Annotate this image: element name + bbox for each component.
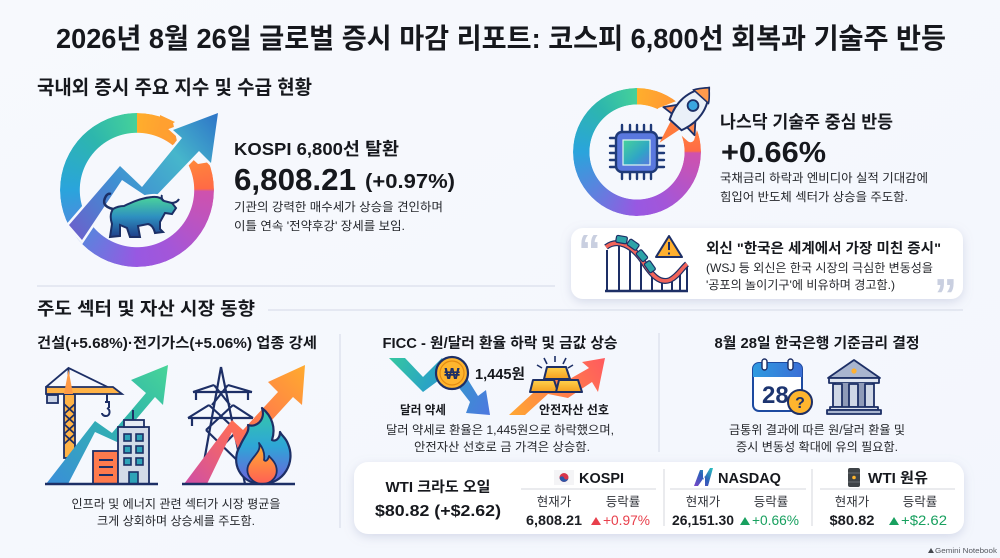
panel: FICC: 1,445원 (475, 366, 525, 383)
column: NASDAQ: +0.66% (752, 513, 799, 528)
panel: Bank of Korea rate decision (714, 335, 920, 454)
panel: FICC: 달러 약세로 환율은 1,445원으로 하락했으며, (386, 422, 614, 437)
text block: KOSPI: KOSPI 6,800선 탈환 (234, 139, 399, 159)
column: NASDAQ: 26,151.30 (672, 513, 734, 528)
icon: rising arrow (509, 358, 605, 415)
column: NASDAQ: NASDAQ (718, 471, 781, 487)
icon: calendar with question mark (753, 359, 812, 414)
column: WTI oil: WTI 원유 (868, 470, 928, 487)
panel: construction and utilities sectors: 크게 상회하며 상승세를 주도함. (97, 514, 255, 528)
column: WTI oil: +$2.62 (901, 513, 947, 528)
panel: construction and utilities sectors: 건설(+5.68%)·전기가스(+5.06%) 업종 강세 (37, 335, 317, 352)
panel: construction and utilities sectors (37, 335, 317, 528)
column: KOSPI: 등락률 (606, 495, 640, 509)
text block: KOSPI (234, 139, 455, 233)
text block: NASDAQ: +0.66% (721, 137, 826, 169)
text block: NASDAQ: 힘입어 반도체 섹터가 상승을 주도함. (720, 190, 908, 204)
icon: chip ring with rocket (573, 86, 710, 216)
icon: closing quote: ” (934, 269, 957, 321)
column: KOSPI: 6,808.21 (526, 513, 583, 528)
panel: FICC: 달러 약세 (400, 403, 446, 417)
icon: calendar with question mark: 28 (762, 382, 789, 409)
panel: Bank of Korea rate decision: 금통위 결과에 따른 원/달러 환율 및 (729, 423, 905, 437)
column: KOSPI: +0.97% (603, 513, 650, 528)
panel: FICC (382, 335, 618, 454)
column: WTI oil: $80.82 (830, 513, 874, 528)
column: WTI oil: 현재가 (835, 495, 870, 509)
icon: bank building (827, 360, 881, 414)
column: KOSPI: 현재가 (537, 495, 572, 509)
callout: foreign press warning: 외신 "한국은 세계에서 가장 미친 증시" (706, 240, 941, 256)
icon: won coin (436, 357, 468, 389)
panel: FICC: 안전자산 선호 (539, 403, 609, 417)
icon: falling arrow (389, 358, 490, 415)
icon: won coin: ₩ (444, 366, 460, 383)
column: KOSPI: KOSPI (579, 471, 624, 487)
panel: FICC: FICC - 원/달러 환율 하락 및 금값 상승 (382, 335, 618, 352)
column: NASDAQ: 등락률 (754, 495, 788, 509)
title: 2026년 8월 26일 글로벌 증시 마감 리포트: 코스피 6,800선 회복과 기술주 반등 (56, 23, 946, 54)
callout: foreign press warning: (WSJ 등 외신은 한국 시장의 극심한 변동성을 (706, 261, 933, 275)
text block: KOSPI: 6,808.21 (234, 162, 356, 197)
text block: KOSPI: 기관의 강력한 매수세가 상승을 견인하며 (234, 200, 443, 214)
icon: power pylon, arrow and flame (182, 365, 305, 484)
watermark: Gemini Notebook (935, 546, 997, 555)
text block: NASDAQ: 국채금리 하락과 엔비디아 실적 기대감에 (720, 171, 928, 185)
panel: Bank of Korea rate decision: 증시 변동성 확대에 유의 필요함. (736, 440, 898, 454)
heading: leading sectors and asset markets: 주도 섹터 및 자산 시장 동향 (37, 299, 255, 319)
column: WTI oil: 등락률 (903, 495, 937, 509)
icon: crane, arrow and buildings (45, 365, 168, 484)
text block: KOSPI: 이틀 연속 '전약후강' 장세를 보임. (234, 218, 405, 233)
column: NASDAQ: 현재가 (686, 495, 721, 509)
icon: roller coaster (605, 235, 688, 291)
icon: warning triangle (656, 236, 682, 257)
column: NASDAQ (670, 468, 806, 528)
text block: WTI crude: WTI 크라도 오일 (386, 479, 490, 496)
column: KOSPI (521, 470, 656, 528)
panel: construction and utilities sectors: 인프라 및 에너지 관련 섹터가 시장 평균을 (72, 497, 280, 511)
icon: opening quote: “ (578, 225, 601, 277)
text block: KOSPI: (+0.97%) (365, 171, 455, 193)
panel: market summary table (354, 462, 964, 534)
column: WTI oil (820, 468, 955, 528)
text block: NASDAQ (720, 112, 928, 204)
text block: WTI crude: $80.82 (+$2.62) (375, 503, 501, 520)
text block: WTI crude (375, 479, 501, 520)
callout: foreign press warning: '공포의 놀이기구'에 비유하며 경고함.) (706, 278, 895, 292)
icon: calendar with question mark: ? (795, 395, 805, 412)
icon: KOSPI ring with arrow and bull (60, 112, 222, 267)
heading: domestic and global indices: 국내외 증시 주요 지수 및 수급 현황 (37, 77, 312, 99)
panel: FICC: 안전자산 선호로 금 가격은 상승함. (414, 440, 590, 454)
panel: Bank of Korea rate decision: 8월 28일 한국은행 기준금리 결정 (714, 335, 920, 352)
callout: foreign press warning (571, 225, 963, 321)
icon: gold bars (530, 367, 582, 392)
text block: NASDAQ: 나스닥 기술주 중심 반등 (720, 112, 893, 132)
